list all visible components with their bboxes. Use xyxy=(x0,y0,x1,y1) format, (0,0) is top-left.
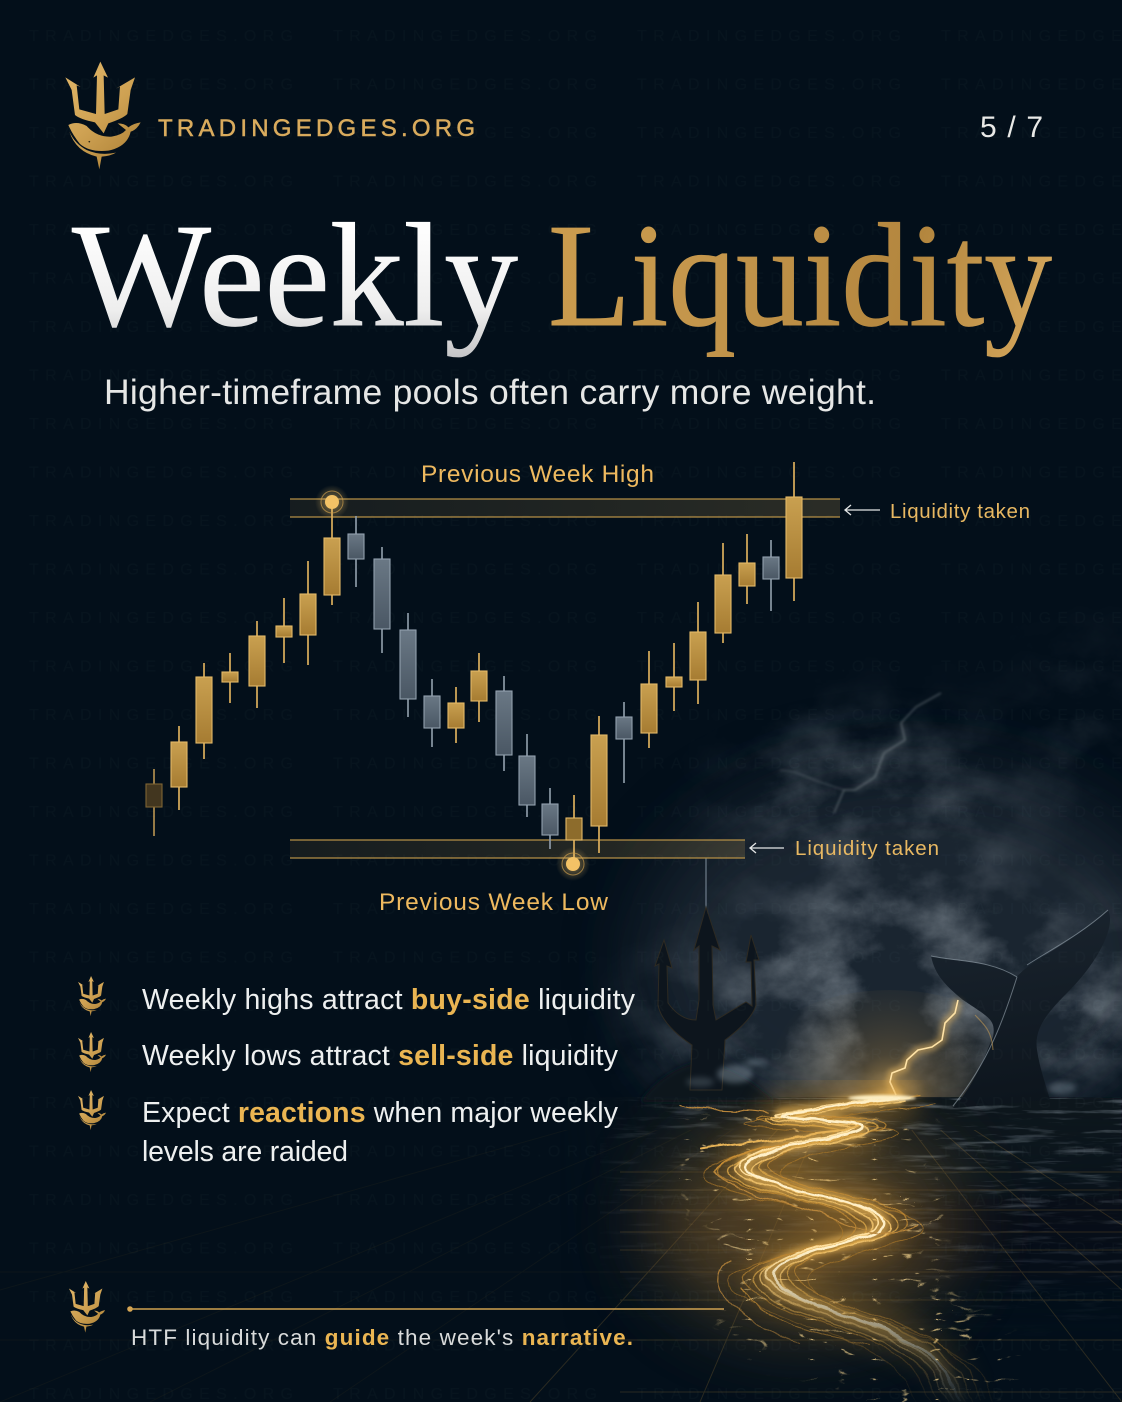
candle 27 xyxy=(786,462,802,601)
candle 23 xyxy=(690,602,706,704)
candle 12 xyxy=(424,679,440,747)
candle 13 xyxy=(448,687,464,743)
candle 6 xyxy=(276,598,292,663)
horizon glow xyxy=(760,990,1020,1130)
title: Liquidity xyxy=(548,194,1052,358)
candle 8 xyxy=(324,503,340,605)
bullet text 3: levels are raided xyxy=(142,1136,348,1168)
candle 10 xyxy=(374,547,390,653)
high marker dot xyxy=(315,485,349,519)
perspective grid xyxy=(0,1130,1122,1402)
label: previous week high: Previous Week High xyxy=(421,461,654,488)
trident silhouette xyxy=(640,858,775,1102)
candle 25 xyxy=(739,534,755,604)
candles xyxy=(146,462,802,863)
candle 3 xyxy=(196,663,212,759)
previous week low band xyxy=(290,840,745,858)
candle 17 xyxy=(542,788,558,849)
storm clouds xyxy=(610,672,1122,1098)
label: liquidity taken high: Liquidity taken xyxy=(890,500,1030,523)
bullet list xyxy=(78,976,636,1168)
subtitle: Higher-timeframe pools often carry more weight. xyxy=(104,372,876,412)
footer icon xyxy=(69,1281,105,1333)
candle 7 xyxy=(300,561,316,665)
candle 11 xyxy=(400,613,416,717)
bullet icon 2 xyxy=(78,1032,106,1072)
whale tail xyxy=(931,910,1110,1108)
candle 2 xyxy=(171,726,187,810)
candlestick chart xyxy=(146,461,1030,916)
label: previous week low: Previous Week Low xyxy=(379,889,608,916)
candle 18 xyxy=(566,795,582,863)
arrow: high liquidity xyxy=(845,505,880,515)
candle 16 xyxy=(519,734,535,817)
footer xyxy=(69,1281,724,1350)
footer rule xyxy=(127,1306,724,1312)
candle 14 xyxy=(471,653,487,722)
candle 19 xyxy=(591,716,607,853)
candle 24 xyxy=(715,543,731,643)
candle 20 xyxy=(616,702,632,783)
bullet text 3 xyxy=(142,1097,619,1168)
candle 5 xyxy=(249,621,265,708)
bullet text 2: Weekly lows attract sell-side liquidity xyxy=(142,1040,619,1072)
bullet icon 1 xyxy=(78,976,106,1016)
bullet text 1: Weekly highs attract buy-side liquidity xyxy=(142,984,636,1016)
label: liquidity taken low: Liquidity taken xyxy=(795,837,939,860)
previous week high band xyxy=(290,499,840,517)
candle 21 xyxy=(641,651,657,748)
upper lightning xyxy=(780,693,941,813)
golden river xyxy=(679,1080,1021,1402)
gold water glow xyxy=(655,1120,955,1330)
sea lightning xyxy=(890,1000,958,1095)
bullet text 3: Expect reactions when major weekly xyxy=(142,1097,619,1129)
sea xyxy=(602,1097,1122,1307)
title xyxy=(72,194,1052,358)
bullet icon 3 xyxy=(78,1090,106,1130)
storm art scene xyxy=(0,672,1122,1402)
candle 26 xyxy=(763,540,779,611)
candle 9 xyxy=(348,516,364,587)
arrow: low liquidity xyxy=(750,843,784,853)
candle 15 xyxy=(496,676,512,771)
brand name: TRADINGEDGES.ORG xyxy=(158,115,475,142)
candle 22 xyxy=(666,643,682,711)
title: Weekly xyxy=(72,194,518,358)
footer text: HTF liquidity can guide the week's narrative. xyxy=(131,1325,633,1350)
candle 4 xyxy=(222,653,238,703)
candle 1 xyxy=(146,769,162,836)
page number: 5 / 7 xyxy=(980,111,1043,144)
low marker dot xyxy=(556,847,590,881)
brand logo xyxy=(65,62,141,169)
